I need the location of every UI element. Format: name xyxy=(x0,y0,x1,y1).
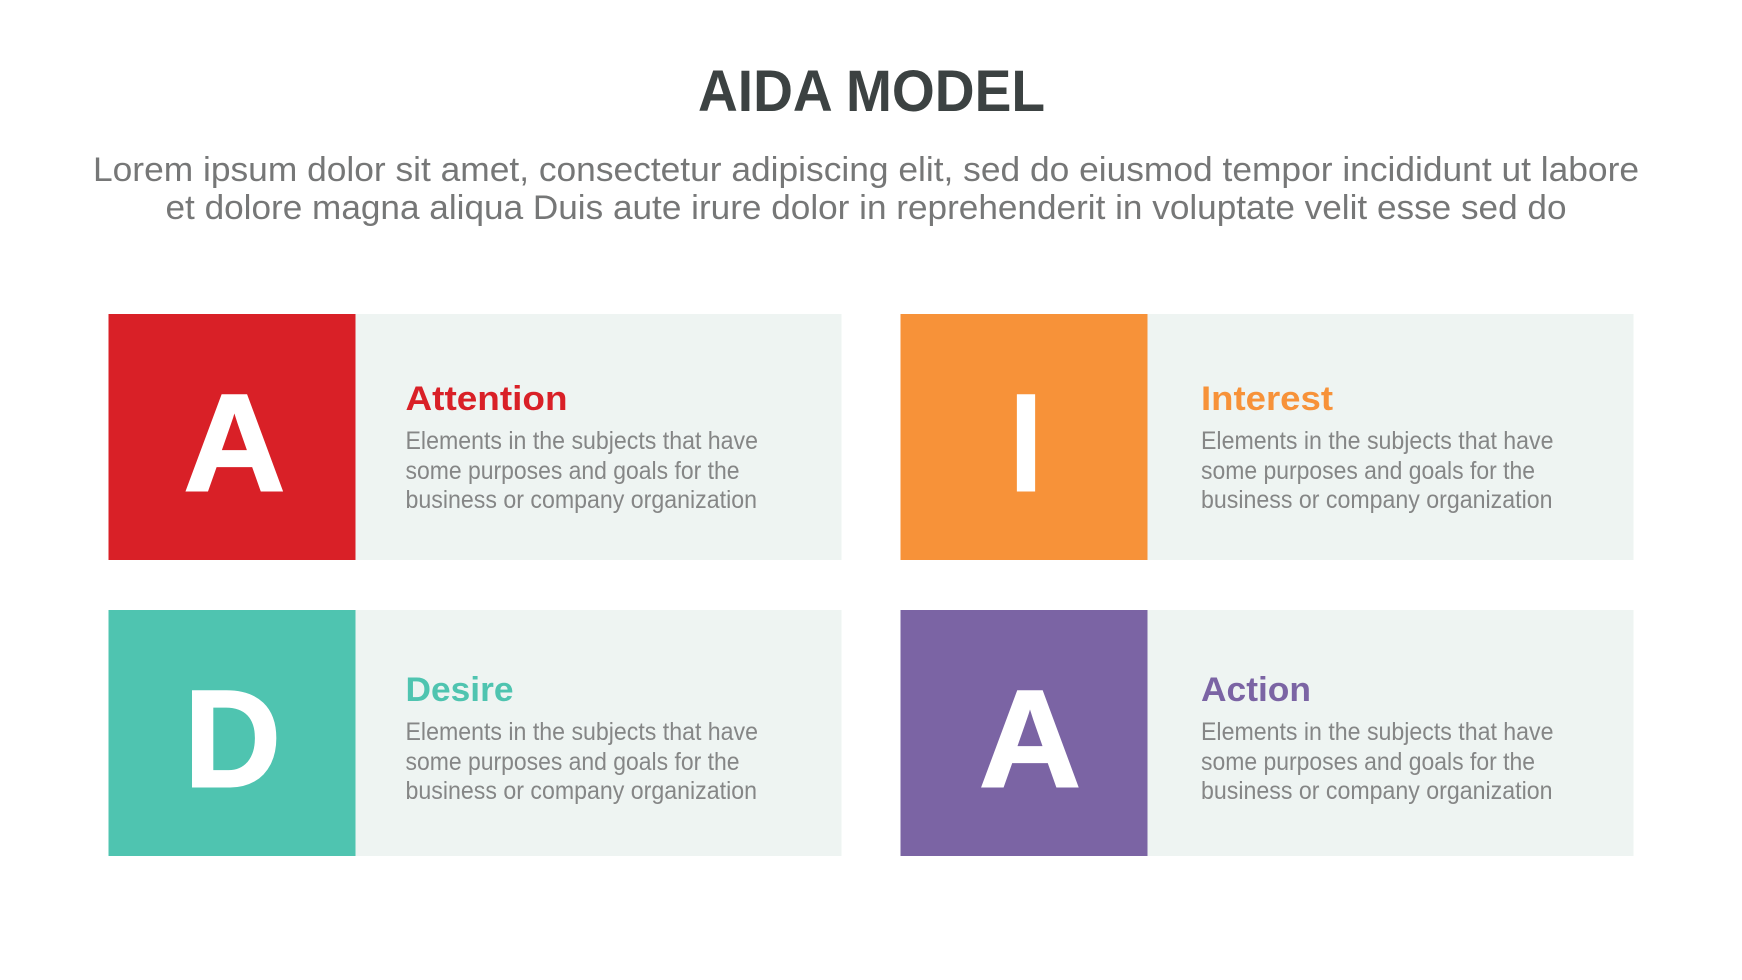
text block: attention xyxy=(406,427,758,514)
letter tile: I orange: I xyxy=(1010,366,1042,520)
text block: desire: Elements in the subjects that have xyxy=(406,718,758,746)
text block: action: Elements in the subjects that have xyxy=(1201,718,1554,746)
text block: attention: some purposes and goals for the xyxy=(406,457,740,485)
text block: interest: some purposes and goals for the xyxy=(1201,457,1535,485)
panel: interest xyxy=(900,314,1634,560)
text block: interest: Elements in the subjects that have xyxy=(1201,427,1554,455)
heading: interest: Interest xyxy=(1201,380,1333,418)
title: AIDA MODEL xyxy=(698,59,1045,124)
letter tile: A red: A xyxy=(183,366,285,520)
panel: desire xyxy=(108,610,842,856)
text block: desire: business or company organization xyxy=(406,777,757,805)
text block: action: some purposes and goals for the xyxy=(1201,748,1535,776)
heading: desire: Desire xyxy=(406,671,514,709)
panel: attention xyxy=(108,314,842,560)
panel: action xyxy=(900,610,1634,856)
subtitle text block xyxy=(93,151,1639,227)
letter tile: A purple: A xyxy=(979,662,1081,816)
text block: desire xyxy=(406,718,758,805)
text block: desire: some purposes and goals for the xyxy=(406,748,740,776)
text block: interest xyxy=(1201,427,1554,514)
subtitle text block: et dolore magna aliqua Duis aute irure dolor in reprehenderit in voluptate velit esse sed do xyxy=(166,189,1566,227)
text block: attention: Elements in the subjects that have xyxy=(406,427,758,455)
subtitle text block: Lorem ipsum dolor sit amet, consectetur adipiscing elit, sed do eiusmod tempor incididunt ut labore xyxy=(93,151,1639,189)
text block: interest: business or company organization xyxy=(1201,486,1552,514)
letter tile: D teal xyxy=(108,610,356,856)
letter tile: D teal: D xyxy=(184,662,281,816)
heading: attention: Attention xyxy=(406,380,568,418)
letter tile: A red xyxy=(108,314,356,560)
letter tile: I orange xyxy=(900,314,1148,560)
text block: action: business or company organization xyxy=(1201,777,1552,805)
letter tile: A purple xyxy=(900,610,1148,856)
heading: action: Action xyxy=(1201,671,1311,709)
text block: action xyxy=(1201,718,1554,805)
text block: attention: business or company organization xyxy=(406,486,757,514)
